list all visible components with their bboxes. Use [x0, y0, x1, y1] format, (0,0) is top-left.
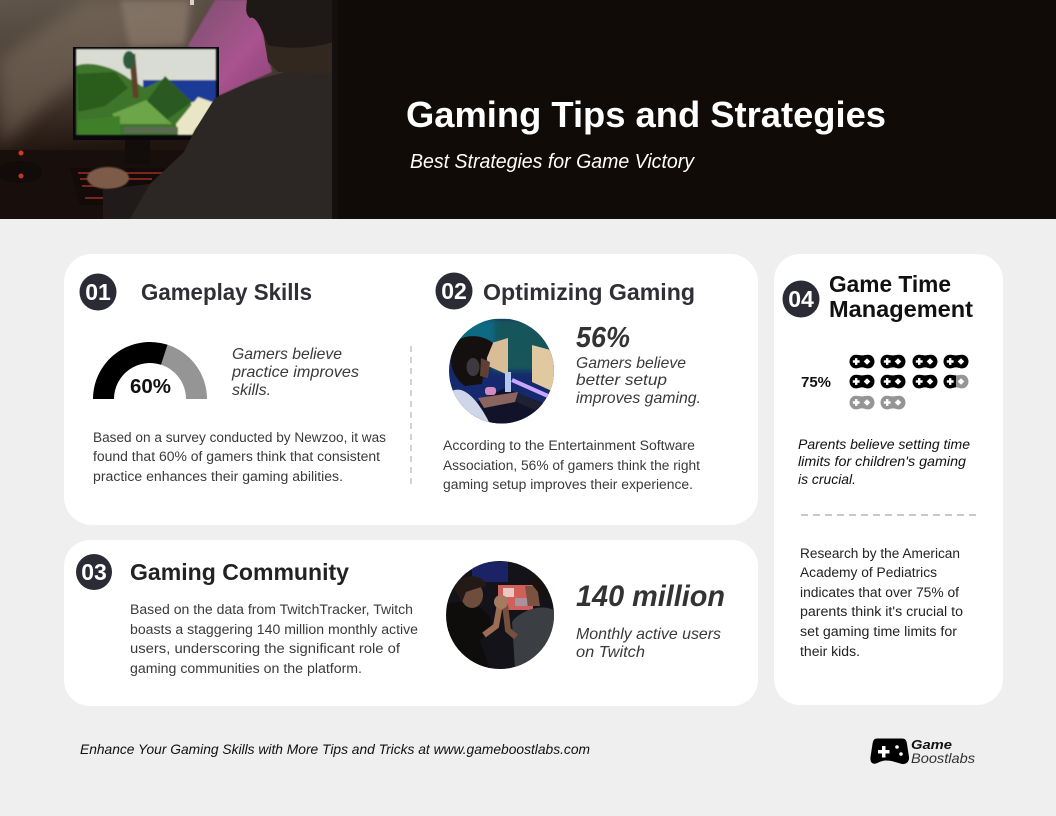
logo: Game Boostlabs [870, 737, 975, 766]
skills callout text: practice improves [231, 364, 359, 381]
stat 56%: 56% [576, 322, 630, 354]
skills body text [93, 430, 386, 484]
setup callout text: improves gaming. [576, 390, 701, 407]
skills body text: practice enhances their gaming abilities. [93, 469, 343, 484]
time limits body text: indicates that over 75% of [800, 585, 959, 600]
time limits callout text: limits for children's gaming [798, 453, 966, 469]
badge 03 [76, 554, 112, 590]
header banner [0, 0, 1056, 219]
twitch callout text [576, 626, 721, 661]
panel: skills and optimizing [64, 254, 758, 525]
setup body text: gaming setup improves their experience. [443, 477, 693, 492]
setup callout text [576, 355, 701, 407]
heading: game time management [829, 271, 973, 322]
setup callout text: Gamers believe [576, 355, 686, 372]
setup body text [443, 438, 700, 492]
icon: logo gamepad [870, 738, 909, 764]
pictogram: gamepads 75% [850, 355, 968, 409]
badge 04: 04 [788, 286, 814, 312]
time limits body text [800, 546, 963, 659]
badge 04 [782, 280, 820, 318]
heading: gaming community: Gaming Community [130, 559, 349, 585]
logo: Game Boostlabs: Game [911, 737, 952, 752]
time limits body text: set gaming time limits for [800, 624, 958, 639]
panel: gaming community [64, 540, 758, 706]
gauge chart 60%: 60% [130, 376, 171, 398]
subtitle: Best Strategies for Game Victory [410, 151, 695, 173]
community body text: users, underscoring the significant role of [130, 641, 400, 656]
time limits body text: parents think it's crucial to [800, 604, 963, 619]
footer call to action: Enhance Your Gaming Skills with More Tips and Tricks at www.gameboostlabs.com [80, 741, 590, 757]
setup body text: According to the Entertainment Software [443, 438, 695, 453]
photo: two gamers fist bump [446, 561, 556, 669]
twitch callout text: on Twitch [576, 644, 645, 661]
community body text: boasts a staggering 140 million monthly active [130, 622, 418, 637]
heading: game time management: Management [829, 296, 973, 322]
badge 03: 03 [81, 559, 107, 585]
time limits callout text: Parents believe setting time [798, 436, 970, 452]
time limits body text: Research by the American [800, 546, 960, 561]
skills body text: Based on a survey conducted by Newzoo, it was [93, 430, 386, 445]
heading: game time management: Game Time [829, 271, 951, 297]
badge 01: 01 [85, 279, 111, 305]
time limits callout text [798, 436, 970, 487]
gauge chart 60% [93, 342, 207, 399]
stat 75%: 75% [801, 374, 831, 391]
stat 140 million: 140 million [576, 580, 725, 613]
badge 02 [436, 272, 472, 310]
time limits body text: Academy of Pediatrics [800, 565, 937, 580]
heading: optimizing gaming: Optimizing Gaming [483, 279, 695, 305]
skills callout text: Gamers believe [232, 346, 342, 363]
badge 02: 02 [441, 278, 467, 304]
skills body text: found that 60% of gamers think that consistent [93, 449, 380, 464]
time limits callout text: is crucial. [798, 471, 856, 487]
badge 01 [80, 274, 116, 310]
photo: gaming setup [449, 319, 555, 424]
community body text: gaming communities on the platform. [130, 661, 362, 676]
setup body text: Association, 56% of gamers think the right [443, 458, 700, 473]
title: Gaming Tips and Strategies [406, 94, 886, 135]
time limits body text: their kids. [800, 644, 860, 659]
twitch callout text: Monthly active users [576, 626, 721, 643]
panel: game time management [774, 254, 1003, 705]
community body text [130, 602, 418, 676]
heading: gameplay skills: Gameplay Skills [141, 279, 312, 305]
skills callout text [231, 346, 359, 399]
logo: Game Boostlabs: Boostlabs [911, 750, 975, 766]
skills callout text: skills. [232, 382, 271, 399]
community body text: Based on the data from TwitchTracker, Twitch [130, 602, 413, 617]
setup callout text: better setup [576, 372, 667, 389]
header photo: gamer at monitor [0, 0, 338, 219]
